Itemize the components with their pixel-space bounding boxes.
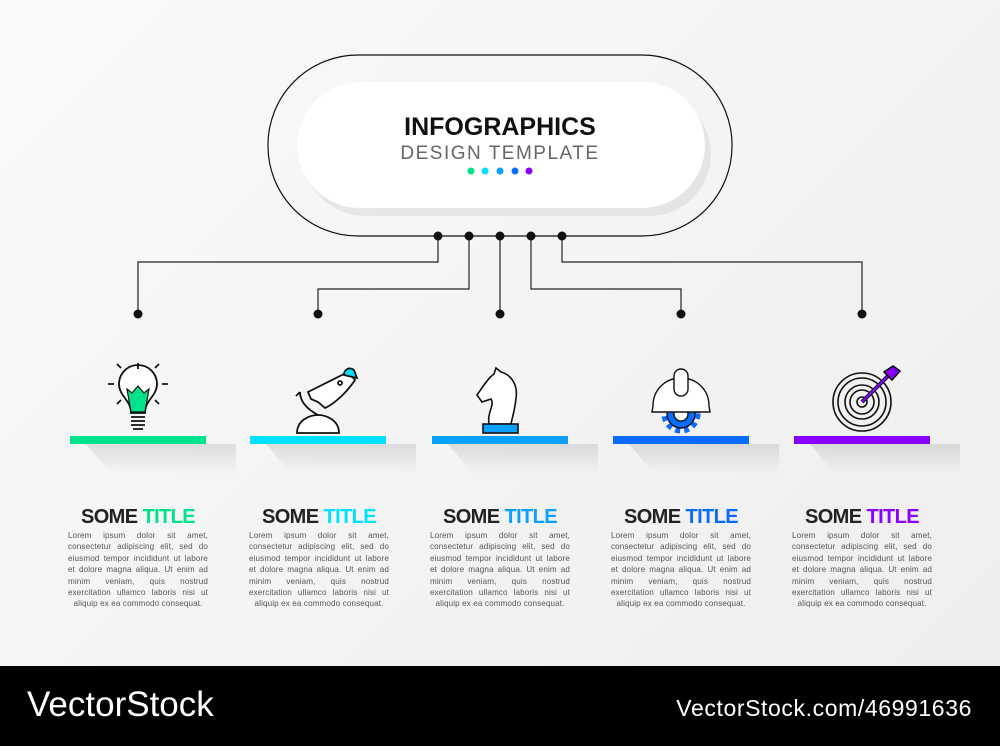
footer brand: VectorStock (27, 685, 214, 724)
column 1 text: SOME TITLE (81, 506, 195, 528)
column 4 text: Lorem ipsum dolor sit amet, consectetur adipiscing elit, sed do eiusmod tempor incididunt ut labore et dolore magna aliqua. Ut enim ad minim veniam, quis nostrud exercitation ullamco laboris nisi ut aliquip ex ea commodo consequat. (611, 531, 751, 608)
column 1 text: Lorem ipsum dolor sit amet, consectetur adipiscing elit, sed do eiusmod tempor incididunt ut labore et dolore magna aliqua. Ut enim ad minim veniam, quis nostrud exercitation ullamco laboris nisi ut aliquip ex ea commodo consequat. (68, 531, 208, 608)
bar: cyan (250, 436, 386, 444)
icon: chess knight (477, 368, 518, 433)
shadows (86, 444, 236, 464)
column 2 text: Lorem ipsum dolor sit amet, consectetur adipiscing elit, sed do eiusmod tempor incididunt ut labore et dolore magna aliqua. Ut enim ad minim veniam, quis nostrud exercitation ullamco laboris nisi ut aliquip ex ea commodo consequat. (249, 531, 389, 608)
column 5 text: SOME TITLE (805, 506, 919, 528)
title (400, 113, 600, 164)
icon: microscope (296, 368, 357, 433)
header inner pill (297, 82, 711, 216)
icon: helmet gear (652, 369, 710, 431)
footer (0, 666, 1000, 746)
bar: purple (794, 436, 930, 444)
title: DESIGN TEMPLATE (400, 143, 600, 164)
bar: green (70, 436, 206, 444)
column 4 text: SOME TITLE (624, 506, 738, 528)
icon: target (833, 366, 900, 431)
bar: blue (432, 436, 568, 444)
column 3 text: SOME TITLE (443, 506, 557, 528)
icon: light bulb (108, 363, 168, 429)
title: INFOGRAPHICS (404, 113, 596, 141)
header pill outline (268, 55, 732, 236)
column 3 text: Lorem ipsum dolor sit amet, consectetur adipiscing elit, sed do eiusmod tempor incididunt ut labore et dolore magna aliqua. Ut enim ad minim veniam, quis nostrud exercitation ullamco laboris nisi ut aliquip ex ea commodo consequat. (430, 531, 570, 608)
bar: dark blue (613, 436, 749, 444)
connector lines (138, 236, 862, 314)
column 5 text: Lorem ipsum dolor sit amet, consectetur adipiscing elit, sed do eiusmod tempor incididunt ut labore et dolore magna aliqua. Ut enim ad minim veniam, quis nostrud exercitation ullamco laboris nisi ut aliquip ex ea commodo consequat. (792, 531, 932, 608)
footer url: VectorStock.com/46991636 (676, 695, 972, 721)
color dots (468, 168, 532, 174)
column 2 text: SOME TITLE (262, 506, 376, 528)
